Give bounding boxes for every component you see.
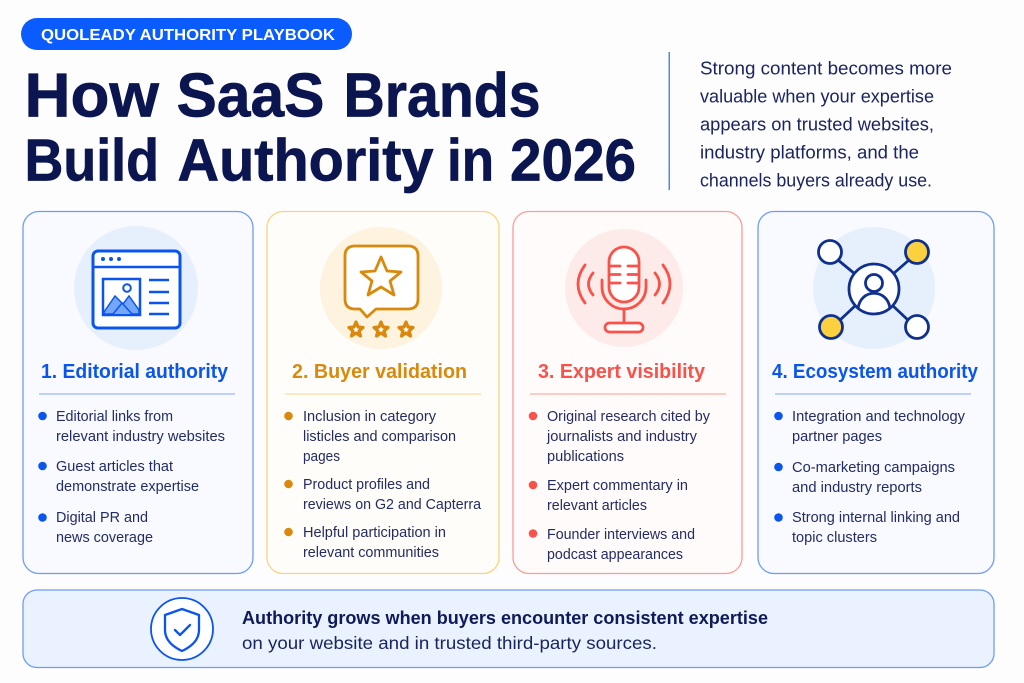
badge: playbook label: QUOLEADY AUTHORITY PLAYBOOK: [41, 27, 335, 44]
bullets: buyer validation: relevant communities: [303, 545, 439, 561]
intro paragraph: Strong content becomes more: [700, 58, 952, 78]
title: Authority: [178, 128, 434, 194]
intro paragraph: [668, 52, 952, 190]
bullets: expert visibility: Original research cited by: [547, 409, 711, 425]
callout text: [242, 608, 768, 653]
bullets: expert visibility: podcast appearances: [547, 547, 683, 563]
title: How: [24, 62, 160, 130]
intro paragraph: industry platforms, and the: [700, 142, 919, 162]
bullets: buyer validation: Product profiles and: [303, 477, 430, 493]
callout: key takeaway: [23, 590, 994, 668]
bullets: ecosystem authority: partner pages: [792, 429, 882, 445]
bullets: buyer validation: pages: [303, 449, 340, 465]
bullets: buyer validation: Helpful participation in: [303, 525, 446, 541]
title: in: [447, 128, 494, 194]
title: Build: [24, 128, 159, 194]
bullets: editorial authority: relevant industry websites: [56, 429, 225, 445]
bullets: editorial authority: Guest articles that: [56, 459, 173, 475]
bullets: buyer validation: Inclusion in category: [303, 409, 437, 425]
panel: ecosystem authority: [758, 212, 994, 574]
bullets: buyer validation: listicles and comparison: [303, 429, 456, 445]
intro paragraph: channels buyers already use.: [700, 170, 932, 190]
icon: microphone: [565, 229, 683, 347]
bullets: expert visibility: [529, 409, 711, 563]
bullets: expert visibility: relevant articles: [547, 498, 647, 514]
bullets: buyer validation: [284, 409, 482, 561]
bullets: expert visibility: Founder interviews and: [547, 527, 695, 543]
heading: buyer validation: 2. Buyer validation: [292, 360, 467, 383]
bullets: editorial authority: Digital PR and: [56, 510, 148, 526]
bullets: editorial authority: demonstrate expertise: [56, 479, 199, 495]
panel: expert visibility: [513, 212, 742, 574]
callout text: Authority grows when buyers encounter consistent expertise: [242, 608, 768, 628]
badge: playbook label: [21, 18, 352, 50]
intro paragraph: valuable when your expertise: [700, 86, 934, 106]
bullets: editorial authority: [38, 409, 225, 546]
bullets: buyer validation: reviews on G2 and Capterra: [303, 497, 482, 513]
title: [24, 62, 636, 194]
title: 2026: [510, 128, 636, 194]
title: SaaS: [176, 62, 324, 130]
icon: review bubble with stars: [320, 227, 442, 349]
bullets: ecosystem authority: [774, 409, 966, 546]
callout text: on your website and in trusted third-party sources.: [242, 633, 657, 653]
heading: ecosystem authority: 4. Ecosystem authority: [772, 360, 979, 383]
heading: expert visibility: 3. Expert visibility: [538, 360, 706, 383]
title: Brands: [344, 62, 540, 130]
bullets: expert visibility: journalists and industry: [546, 429, 698, 445]
bullets: ecosystem authority: Co-marketing campaigns: [792, 460, 955, 476]
bullets: expert visibility: Expert commentary in: [547, 478, 688, 494]
bullets: editorial authority: news coverage: [56, 530, 153, 546]
bullets: ecosystem authority: topic clusters: [792, 530, 877, 546]
bullets: ecosystem authority: and industry reports: [792, 480, 922, 496]
icon: browser window with image: [74, 226, 198, 350]
panel: buyer validation: [267, 212, 499, 574]
heading: editorial authority: 1. Editorial authority: [41, 360, 229, 383]
bullets: ecosystem authority: Integration and technology: [792, 409, 966, 425]
bullets: editorial authority: Editorial links from: [56, 409, 173, 425]
icon: person network: [813, 227, 935, 349]
icon: shield with check: [151, 598, 213, 660]
intro paragraph: appears on trusted websites,: [700, 114, 934, 134]
panel: editorial authority: [23, 212, 253, 574]
bullets: expert visibility: publications: [547, 449, 624, 465]
bullets: ecosystem authority: Strong internal linking and: [792, 510, 960, 526]
